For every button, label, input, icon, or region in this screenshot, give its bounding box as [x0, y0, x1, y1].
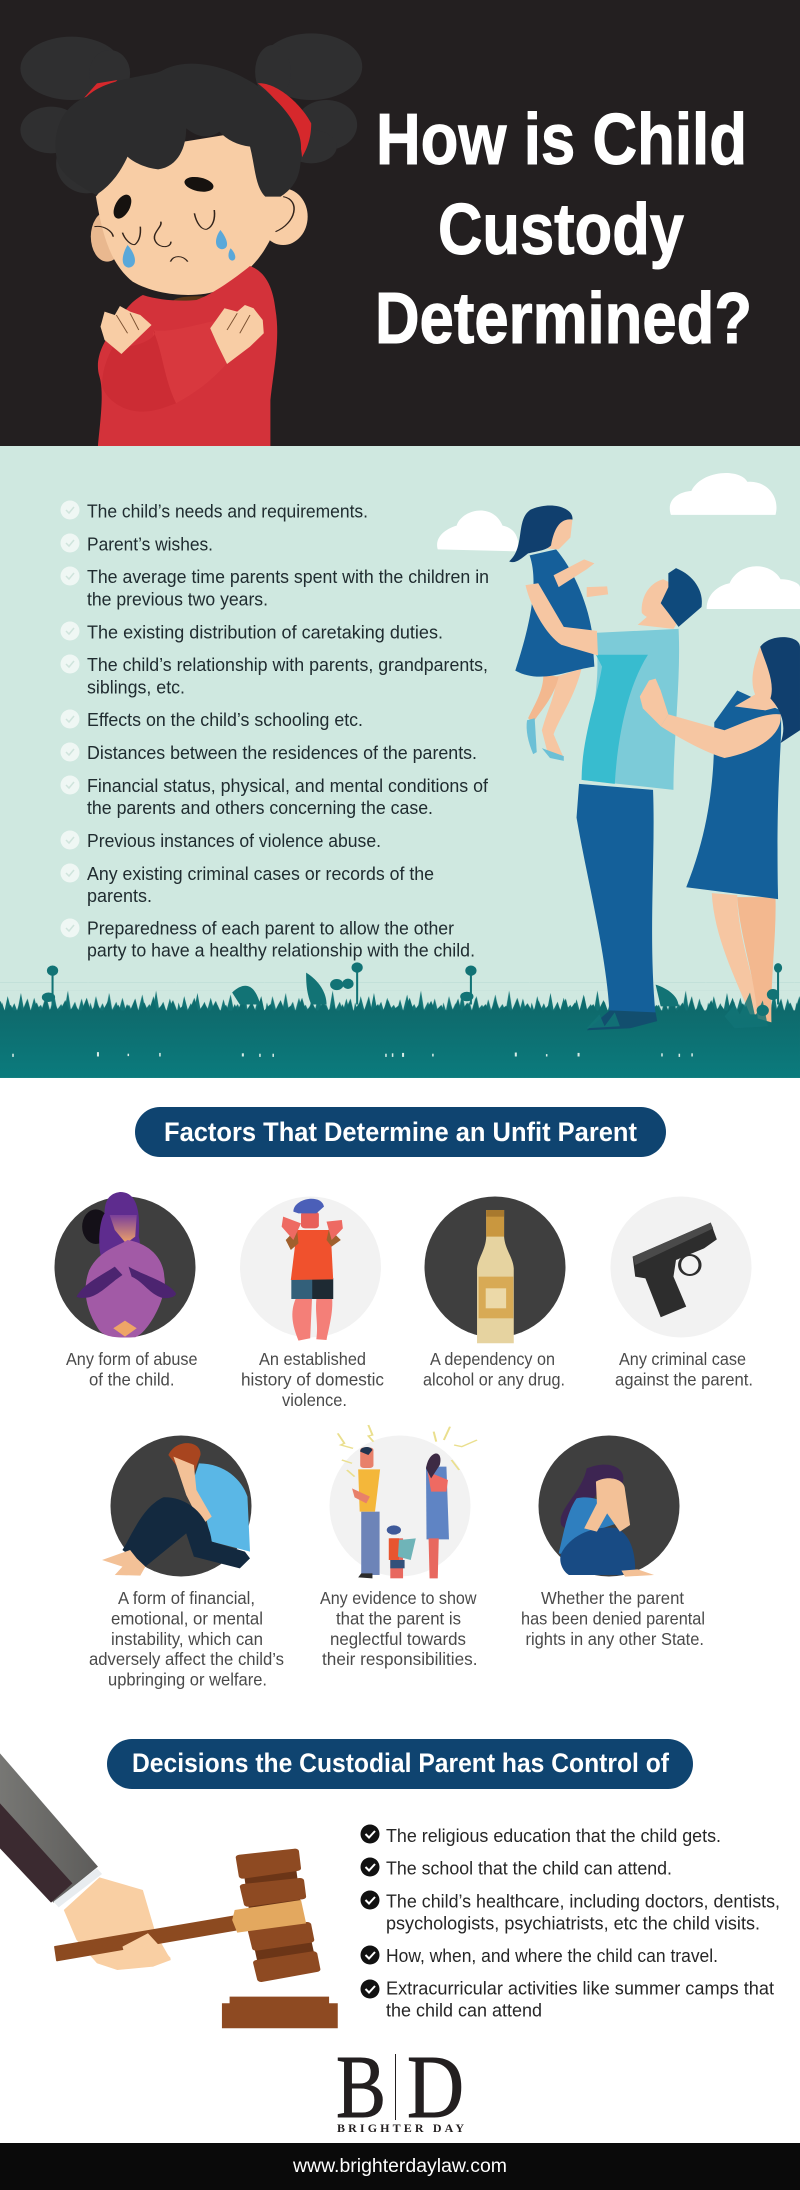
checklist: custody factors: Financial status, physical, and mental conditions of: [87, 775, 489, 796]
icon: frightened boy: [240, 1196, 381, 1341]
panel: custody factors meadow: [0, 446, 800, 1078]
checklist: custody factors: party to have a healthy relationship with the child.: [87, 940, 475, 960]
title: How is Child: [376, 100, 747, 180]
caption: instability: emotional, or mental: [111, 1608, 263, 1628]
caption: instability: adversely affect the child’s: [89, 1649, 284, 1669]
caption: neglect: neglectful towards: [330, 1629, 466, 1649]
checklist: custody factors: siblings, etc.: [87, 676, 185, 698]
checklist: parent decisions: the child can attend: [386, 2000, 542, 2020]
icon: abused woman: [54, 1192, 196, 1338]
illustration: hand holding gavel: [0, 1753, 338, 2028]
heading: factors that determine an unfit parent: Factors That Determine an Unfit Parent: [164, 1117, 637, 1147]
caption: domestic violence: violence.: [282, 1390, 347, 1410]
caption: criminal case: Any criminal case: [619, 1349, 746, 1369]
heading: factors that determine an unfit parent: [135, 1107, 666, 1157]
caption: denied parental rights: has been denied parental: [521, 1608, 705, 1628]
checklist: parent decisions: The religious education that the child gets.: [386, 1825, 721, 1846]
checklist: custody factors: The existing distribution of caretaking duties.: [87, 622, 443, 642]
caption: instability: [89, 1588, 284, 1690]
caption: any form of abuse: of the child.: [89, 1370, 174, 1390]
caption: any form of abuse: [66, 1349, 198, 1390]
footer: website: www.brighterdaylaw.com: [292, 2156, 507, 2177]
checklist: custody factors: Effects on the child’s schooling etc.: [87, 709, 363, 730]
checklist: parent decisions: The child’s healthcare, including doctors, dentists,: [386, 1890, 780, 1912]
heading: decisions the custodial parent has control of: Decisions the Custodial Parent has Control of: [132, 1748, 670, 1778]
icon: handgun: [610, 1196, 752, 1338]
panel: custodial parent decisions: [0, 1739, 780, 2028]
caption: neglect: Any evidence to show: [320, 1588, 477, 1608]
title: [375, 100, 752, 359]
checklist: custody factors: Parent’s wishes.: [87, 534, 213, 554]
footer: website: [0, 2143, 800, 2190]
checklist: parent decisions: The school that the child can attend.: [386, 1858, 672, 1878]
caption: alcohol dependency: alcohol or any drug.: [423, 1370, 565, 1390]
caption: domestic violence: [241, 1349, 384, 1410]
icon: crying woman: [538, 1436, 680, 1577]
checklist: parent decisions: [360, 1824, 780, 2020]
checklist: custody factors: Preparedness of each parent to allow the other: [87, 918, 454, 938]
caption: instability: instability, which can: [111, 1629, 263, 1649]
logo: brighter day: BRIGHTER DAY: [337, 2121, 464, 2135]
caption: denied parental rights: Whether the parent: [541, 1588, 684, 1608]
checklist: custody factors: Any existing criminal cases or records of the: [87, 863, 434, 884]
caption: domestic violence: An established: [259, 1349, 366, 1369]
caption: denied parental rights: rights in any other State.: [526, 1629, 704, 1649]
checklist: parent decisions: Extracurricular activities like summer camps that: [386, 1978, 774, 1998]
caption: domestic violence: history of domestic: [241, 1370, 384, 1390]
checklist: custody factors: the previous two years.: [87, 588, 268, 610]
icon: distressed man: [102, 1436, 252, 1576]
checklist: custody factors: The child’s needs and requirements.: [87, 500, 368, 522]
icon: alcohol bottle: [424, 1196, 566, 1343]
checklist: custody factors: The child’s relationship with parents, grandparents,: [87, 654, 488, 675]
checklist: parent decisions: psychologists, psychiatrists, etc the child visits.: [386, 1912, 760, 1934]
caption: alcohol dependency: [423, 1349, 565, 1390]
caption: alcohol dependency: A dependency on: [430, 1349, 555, 1369]
caption: neglect: that the parent is: [336, 1608, 461, 1628]
caption: criminal case: [615, 1349, 753, 1390]
logo: brighter day: [336, 2038, 464, 2137]
panel: hero header: [0, 0, 800, 446]
illustration: grass and ground: [0, 962, 800, 1078]
checklist: parent decisions: How, when, and where the child can travel.: [386, 1945, 718, 1966]
heading: decisions the custodial parent has control of: [107, 1739, 693, 1789]
checklist: custody factors: Distances between the residences of the parents.: [87, 742, 477, 763]
illustration: crying girl: [20, 33, 362, 446]
caption: denied parental rights: [521, 1588, 705, 1649]
caption: any form of abuse: Any form of abuse: [66, 1349, 198, 1369]
panel: unfit parent factors: [0, 1078, 800, 1728]
caption: neglect: [320, 1588, 478, 1669]
checklist: custody factors: the parents and others concerning the case.: [87, 797, 433, 818]
logo: brighter day: B: [336, 2038, 386, 2137]
caption: neglect: their responsibilities.: [322, 1649, 478, 1669]
illustration: family in meadow: [437, 473, 800, 1030]
icon: arguing parents and child: [330, 1425, 477, 1578]
checklist: custody factors: parents.: [87, 885, 152, 906]
checklist: custody factors: The average time parents spent with the children in: [87, 566, 489, 587]
logo: brighter day: D: [407, 2038, 464, 2137]
checklist: custody factors: [60, 500, 489, 960]
caption: instability: A form of financial,: [118, 1588, 255, 1608]
checklist: custody factors: Previous instances of violence abuse.: [87, 830, 381, 851]
caption: instability: upbringing or welfare.: [108, 1670, 267, 1690]
caption: criminal case: against the parent.: [615, 1370, 753, 1390]
title: Custody: [438, 190, 684, 270]
